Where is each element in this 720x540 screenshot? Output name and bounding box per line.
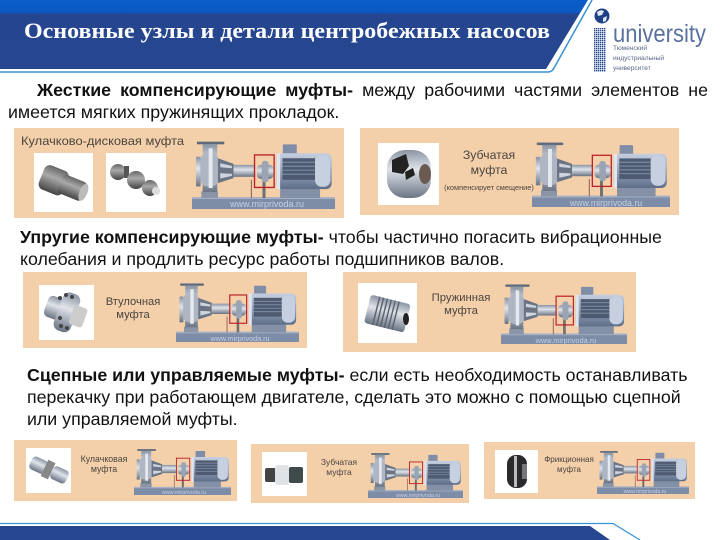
text block: clutch couplings [27,365,688,429]
logo: university [594,8,706,72]
pump diagram: www.mirprivoda.ru [535,336,596,345]
panel: bushing coupling [23,272,307,348]
panel label [432,292,490,317]
text block: clutch couplings: перекачку при работающем двигателе, сделать это можно с помощью сцепной [27,387,681,407]
icon: toothed coupling photo [378,143,439,205]
panel: cam coupling [14,440,237,501]
panel: cam-disc coupling [14,128,344,218]
text block: elastic couplings [20,227,662,269]
pump diagram: www.mirprivoda.ru [395,493,440,499]
pump diagram: www.mirprivoda.ru [229,199,304,209]
wordmark: university [613,20,706,48]
panel label: Кулачковая [81,454,128,464]
panel label [321,457,357,477]
panel label: муфта [116,309,151,321]
pump diagram [192,142,335,209]
panel label [444,148,534,192]
pump diagram: www.mirprivoda.ru [624,489,666,495]
pump diagram [134,449,231,496]
panel label [106,296,160,321]
panel: toothed coupling [360,128,679,215]
header banner [0,0,592,72]
panel label: Зубчатая [463,148,515,162]
pump diagram [176,283,299,343]
text block: clutch couplings: Сцепные или управляемые муфты- если есть необходимость останавливать [27,365,688,385]
icon: dotted tower [594,28,606,72]
icon: friction coupling [495,450,538,493]
university name: университет [613,65,651,72]
panel label [81,454,128,474]
pump diagram [501,284,627,345]
icon: cam coupling [26,448,71,493]
pump diagram: www.mirprivoda.ru [209,334,270,343]
icon: spring coupling [358,283,417,343]
panel label: Пружинная [432,292,490,304]
panel label: муфта [326,467,352,477]
icon: globe [594,8,610,24]
panel label: Фрикционная [544,455,594,464]
panel label: (компенсирует смещение) [444,183,534,192]
icon: toothed coupling [262,452,307,496]
icon: bushing coupling [39,285,94,340]
panel label: муфта [557,465,582,474]
text block: rigid couplings: Жесткие компенсирующие муфты- между рабочими частями элементов не имеется мягких пружинящих прокладок. [8,80,708,122]
university name: индустриальный [613,54,664,62]
pump diagram: www.mirprivoda.ru [161,490,206,496]
panel: friction coupling [484,442,695,499]
text block: elastic couplings: Упругие компенсирующие муфты- чтобы частично погасить вибрационные [20,227,662,247]
panel label: Кулачково-дисковая муфта [21,134,184,148]
pump diagram [597,451,689,495]
panel label: Втулочная [106,296,160,308]
icon: assembled coupling [34,153,93,212]
icon: exploded coupling [106,153,166,212]
panel label: муфта [471,163,508,177]
footer banner [0,524,640,540]
university name [613,44,664,72]
pump diagram [532,143,670,208]
pump diagram: www.mirprivoda.ru [569,198,642,208]
title: Основные узлы и детали центробежных насосов [24,18,550,43]
panel label [544,455,594,474]
panel: toothed coupling small [251,444,469,503]
text block: clutch couplings: или управляемой муфты. [27,409,238,429]
text block: elastic couplings: колебания и продлить ресурс работы подшипников валов. [20,249,504,269]
pump diagram [368,453,463,499]
panel: spring coupling [343,272,636,352]
panel label: Зубчатая [321,457,357,467]
panel label: муфта [444,305,479,317]
panel label: муфта [91,464,117,474]
university name: Тюменский [613,44,647,52]
